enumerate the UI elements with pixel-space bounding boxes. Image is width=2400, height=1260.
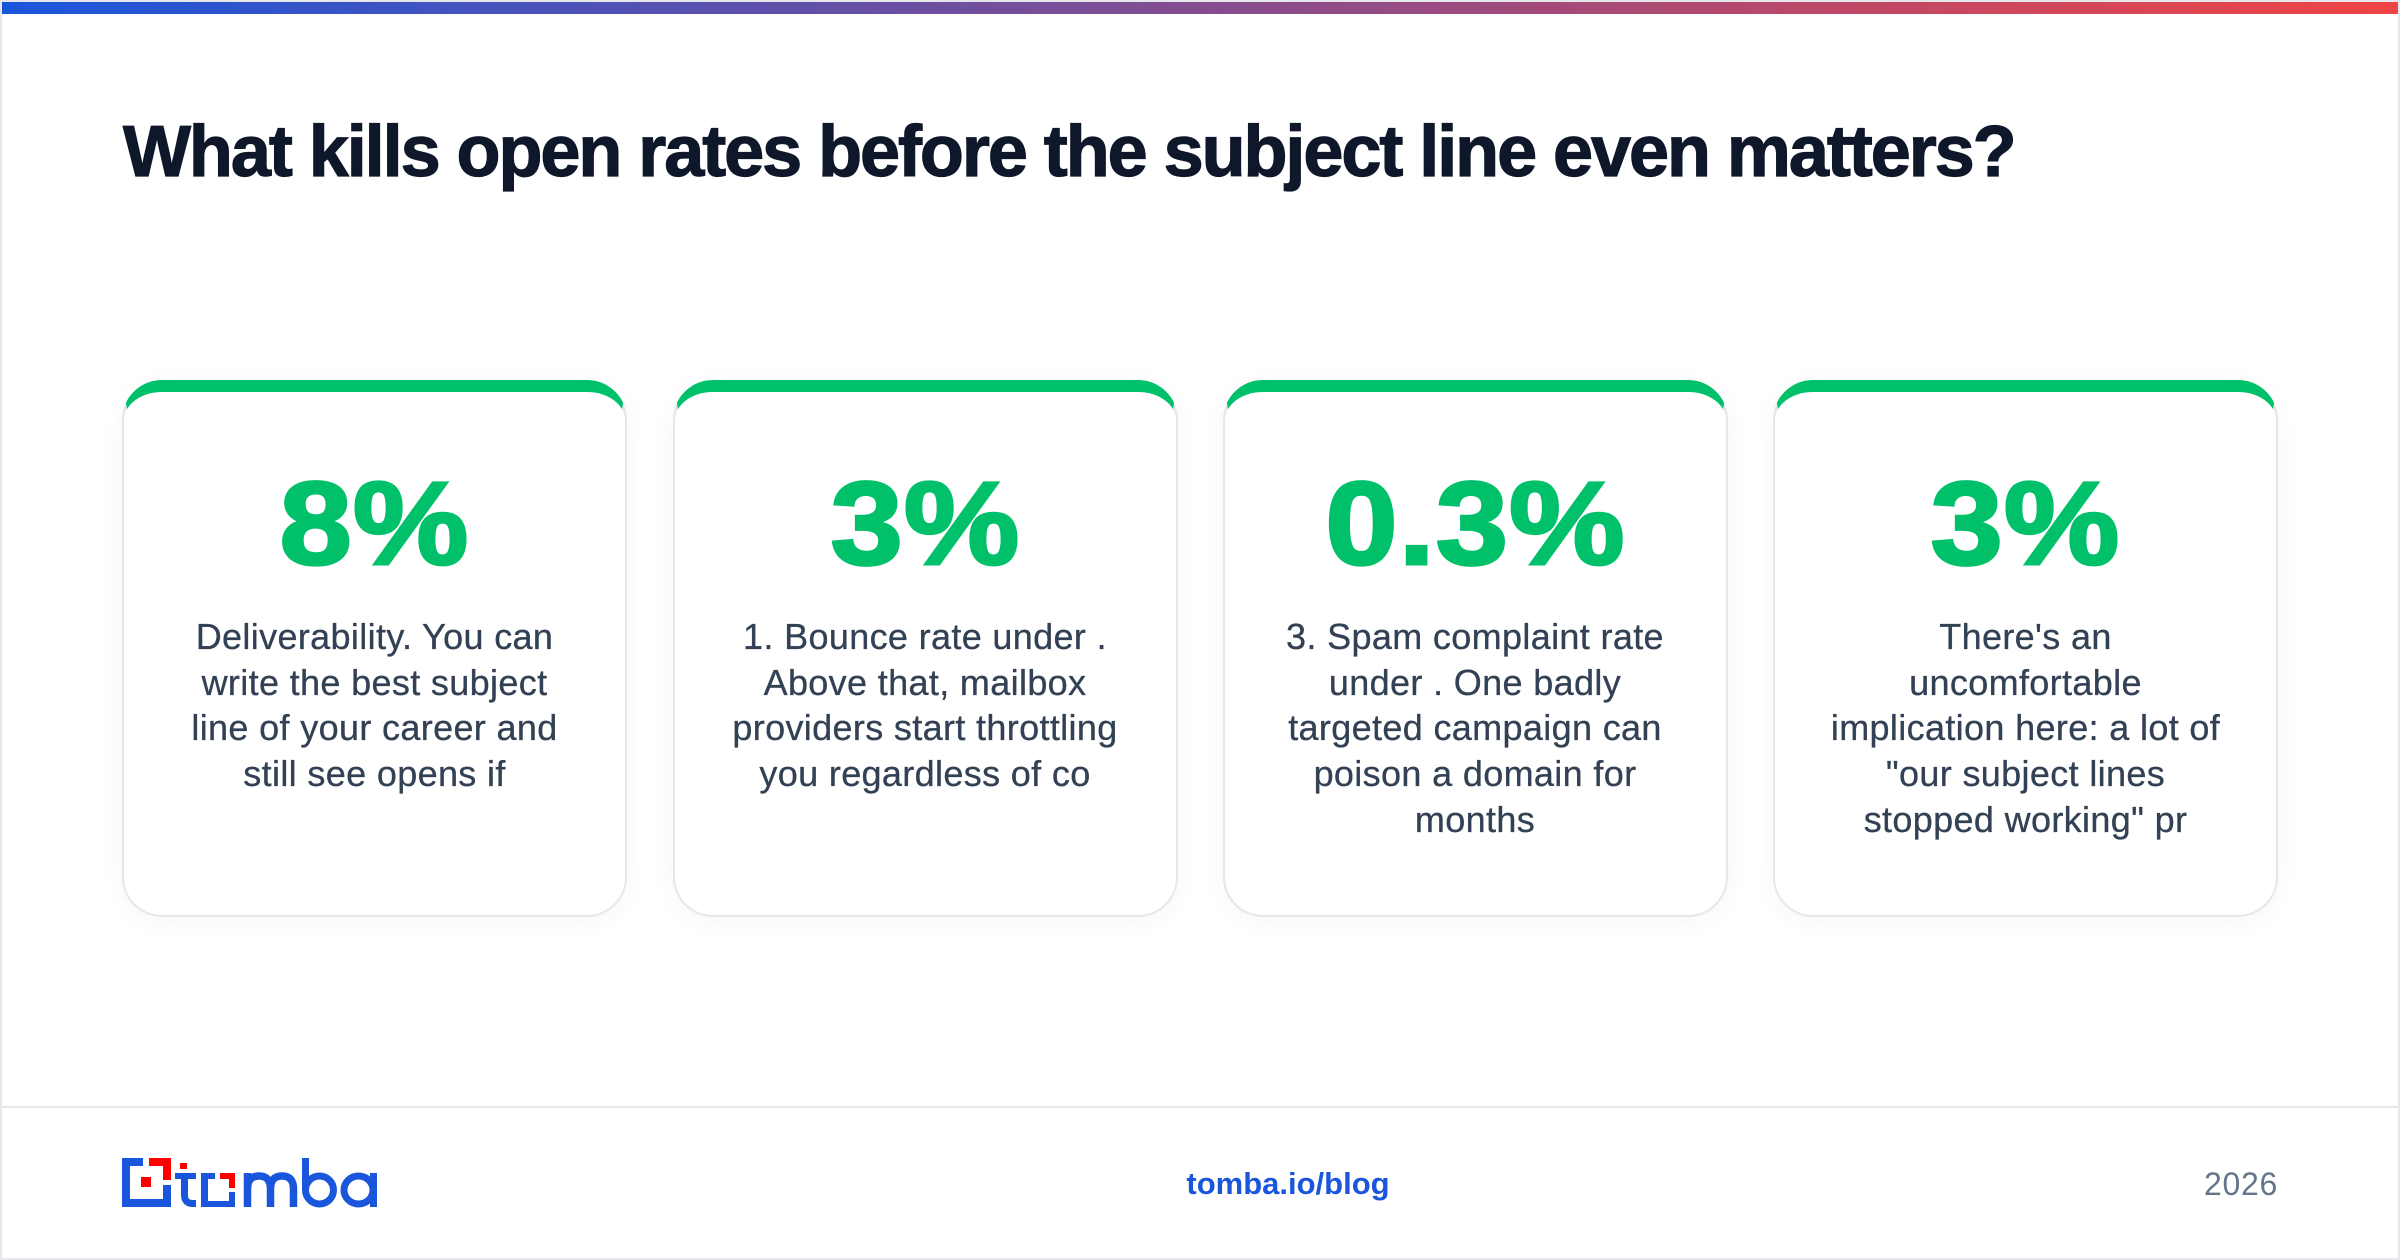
text: card 3 description: poison a domain for	[1314, 753, 1636, 794]
text: card 3 description	[1286, 616, 1664, 840]
panel: card 2 bounce rate	[672, 380, 1178, 917]
title: What kills open rates before the subject line even matters?	[123, 112, 2015, 192]
text: card 4 description: There's an	[1939, 616, 2112, 657]
panel: card 4 implication	[1773, 380, 2278, 917]
stat: 0.3%: 0.3%	[1325, 458, 1625, 590]
logo: tomba	[122, 1158, 377, 1208]
text: card 4 description: implication here: a lot of	[1831, 707, 2220, 748]
text: card 1 description: still see opens if	[243, 753, 506, 794]
footer year: 2026	[2204, 1166, 2278, 1202]
text: card 2 description: 1. Bounce rate under .	[743, 616, 1107, 657]
stat: 8%: 8%	[280, 458, 469, 590]
text: card 4 description	[1831, 616, 2220, 840]
text: card 4 description: "our subject lines	[1886, 753, 2165, 794]
text: card 4 description: uncomfortable	[1909, 662, 2142, 703]
text: card 2 description: you regardless of co	[759, 753, 1091, 794]
text: card 1 description	[191, 616, 558, 794]
stat: 3%: 3%	[1931, 458, 2120, 590]
text: card 1 description: write the best subject	[202, 662, 547, 703]
text: card 3 description: 3. Spam complaint rate	[1286, 616, 1664, 657]
panel: card 3 spam complaints	[1222, 380, 1728, 917]
text: card 2 description	[732, 616, 1118, 794]
text: card 1 description: Deliverability. You can	[196, 616, 553, 657]
stat: 3%: 3%	[830, 458, 1020, 590]
footer divider	[2, 1106, 2398, 1108]
text: card 2 description: providers start throttling	[732, 707, 1118, 748]
text: card 4 description: stopped working" pr	[1864, 799, 2187, 840]
top gradient bar	[2, 2, 2398, 14]
text: card 1 description: line of your career and	[191, 707, 558, 748]
text: card 3 description: under . One badly	[1329, 662, 1621, 703]
text: card 3 description: targeted campaign can	[1288, 707, 1662, 748]
text: card 3 description: months	[1415, 799, 1535, 840]
footer link: tomba.io/blog	[1186, 1166, 1390, 1201]
panel: card 1 deliverability	[122, 380, 627, 917]
text: card 2 description: Above that, mailbox	[764, 662, 1086, 703]
